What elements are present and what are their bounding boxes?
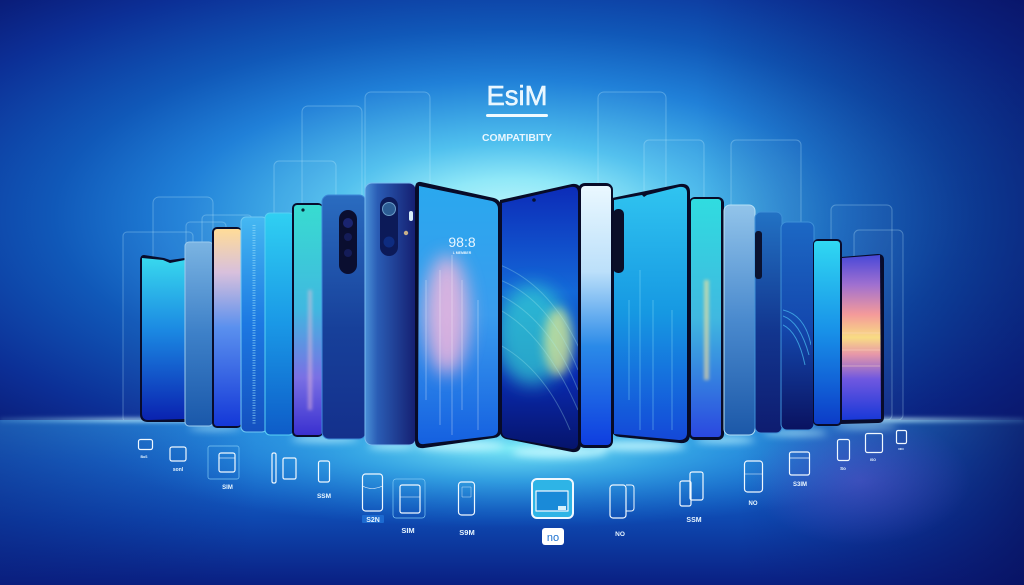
icon: device 16: NIO (898, 447, 904, 451)
icon: device 16 (896, 430, 906, 451)
phone 8 (365, 183, 416, 445)
icon: device 1: BoS (140, 455, 148, 459)
subtitle: COMPATIBITY (482, 133, 552, 144)
icon: device 2 (170, 447, 186, 473)
phone 7 (322, 195, 366, 439)
lock screen clock: 98:8 (448, 234, 476, 250)
icon: device 10 NO (610, 485, 634, 538)
phone reflections (189, 424, 897, 458)
icon: device 10 NO: NO (615, 531, 625, 538)
phone 6 (292, 203, 323, 437)
icon: device 12 NO: NO (748, 501, 758, 507)
phone 11 (578, 183, 613, 448)
icon: device 5 SSM: SSM (317, 493, 331, 500)
phone 12 (612, 184, 690, 443)
phone 10 (496, 184, 581, 452)
icon: device 11 SSM: SSM (686, 517, 702, 524)
icon: device 3 SIM (208, 446, 239, 491)
phone 2 (185, 242, 213, 426)
icon: device 7 SIM: SIM (401, 526, 415, 535)
floor (0, 368, 1024, 585)
phone 18 (841, 254, 884, 424)
phone 13 (689, 197, 724, 440)
title: EsiM (486, 80, 548, 111)
phone 16 (781, 222, 814, 430)
icon: device 9 highlighted (532, 479, 573, 545)
phone 1 (140, 255, 185, 422)
icon: device 15 ISO (866, 434, 882, 462)
icon: device 3 SIM: SIM (222, 485, 233, 491)
phone 17 (813, 239, 842, 426)
icon: device 12 NO (744, 461, 762, 507)
icon: device 9 highlighted: no (547, 532, 559, 544)
icon: device 14 So: So (840, 466, 846, 471)
phone 9: L MEMBER (453, 251, 472, 255)
icon: device 4 (272, 453, 296, 483)
icon: device 13 S3IM: S3IM (793, 482, 807, 488)
background wireframe panels (123, 92, 903, 422)
icon: device 11 SSM (680, 472, 703, 524)
icon: device 6 S2N (362, 474, 384, 524)
icon: device 2: sonl (173, 467, 184, 473)
icon: device 7 SIM (393, 479, 425, 535)
icon: device 13 S3IM (790, 452, 810, 488)
phone 14 (724, 205, 755, 435)
icon: device 15 ISO: ISO (870, 458, 876, 462)
icon: device 8 S9M: S9M (459, 528, 475, 537)
phone 15 (755, 212, 782, 433)
icon: device 5 SSM (317, 461, 331, 500)
icon: device 1 (138, 440, 152, 459)
phone 9 (415, 182, 501, 448)
phone 4 (241, 217, 267, 432)
phone 3 (212, 227, 242, 428)
icon: device 6 S2N: S2N (366, 517, 380, 524)
icon: device 8 S9M (458, 482, 475, 537)
icon: device 14 So (838, 440, 850, 471)
device icons row (138, 430, 906, 545)
phone 5 (265, 213, 294, 435)
